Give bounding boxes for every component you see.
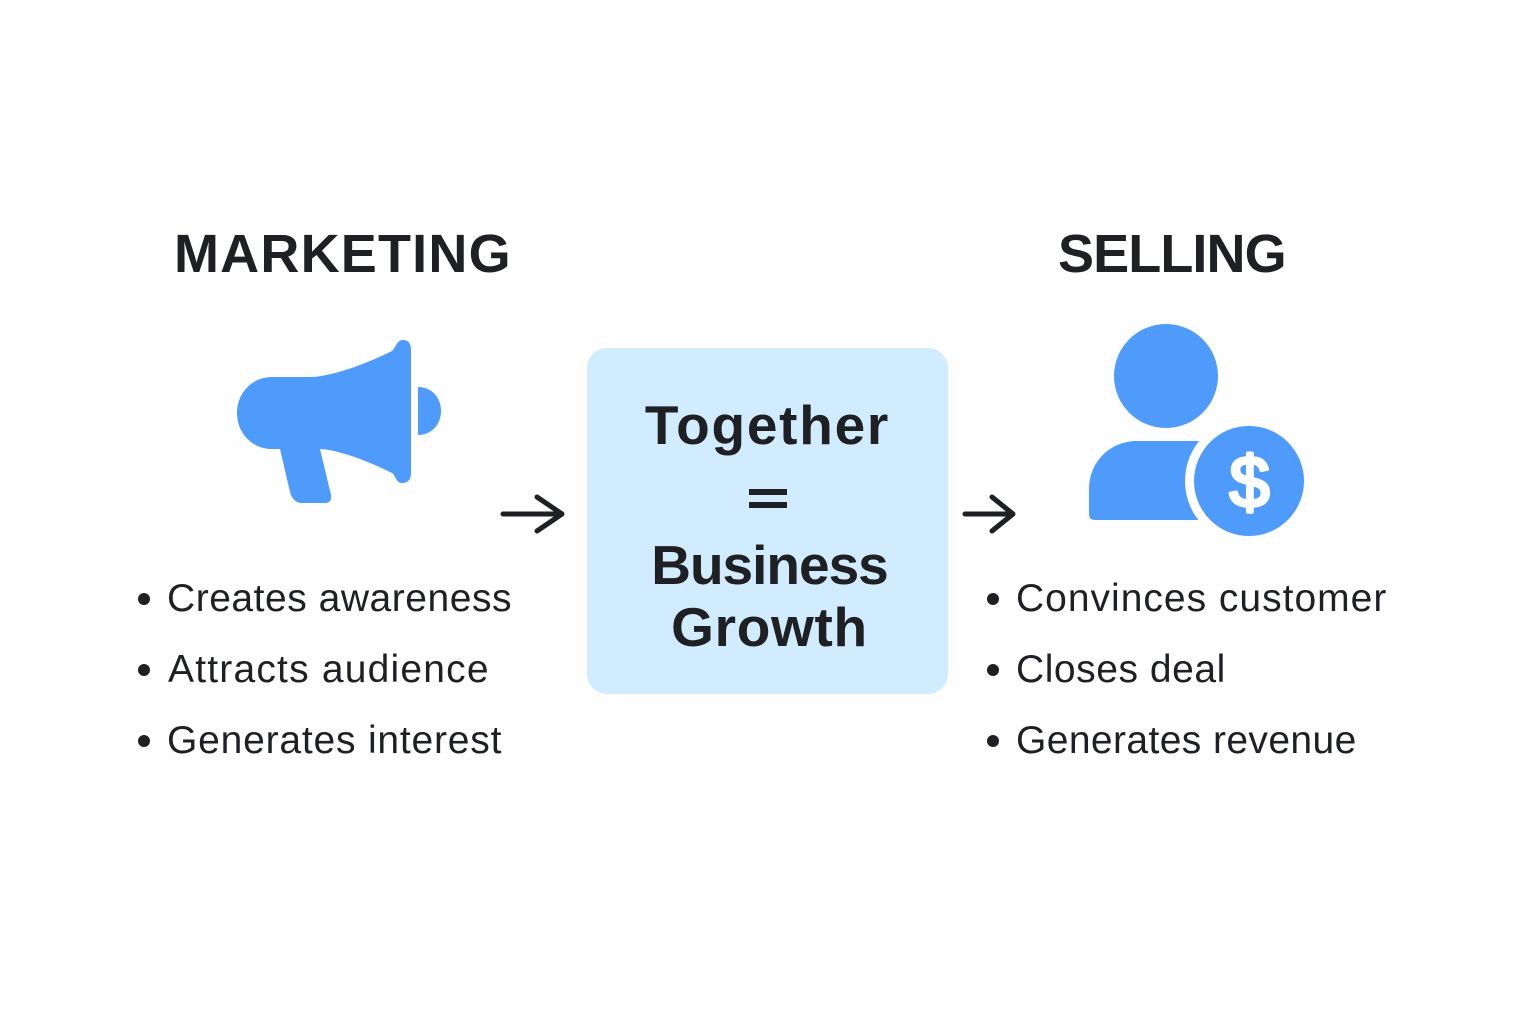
item: closes deal: Closes deal (1016, 648, 1226, 691)
center symbol: equals (749, 489, 787, 508)
list: selling bullets (987, 577, 1387, 762)
item: attracts audience: Attracts audience (168, 648, 490, 691)
item: creates awareness: Creates awareness (167, 577, 512, 620)
center text: together: Together (645, 394, 890, 456)
center text: business: Business (651, 534, 888, 596)
list: marketing bullets (138, 577, 512, 762)
center text: growth: Growth (671, 596, 868, 658)
icon: person with dollar coin (1089, 324, 1304, 536)
bullet dots (987, 593, 999, 747)
heading: marketing: MARKETING (174, 224, 512, 284)
heading: selling: SELLING (1058, 224, 1286, 284)
panel: together equals business growth (587, 348, 948, 694)
item: convinces customer: Convinces customer (1016, 577, 1387, 620)
item: generates revenue: Generates revenue (1016, 719, 1357, 762)
bullet dots (138, 593, 150, 747)
icon: megaphone (237, 340, 441, 503)
dollar sign: $ (1229, 443, 1270, 523)
arrow: marketing to center (500, 494, 564, 534)
item: generates interest: Generates interest (167, 719, 502, 762)
arrow: center to selling (962, 494, 1016, 534)
